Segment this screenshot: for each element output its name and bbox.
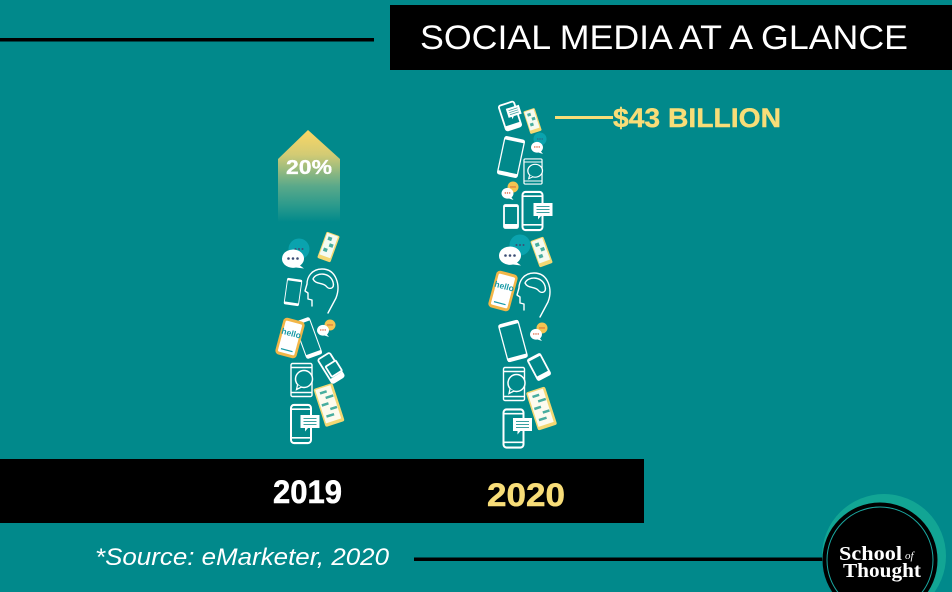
icon: phone with speech bubble (504, 368, 525, 400)
icon: yellow list phone (313, 383, 345, 427)
year label 2020: 2020 (487, 477, 565, 513)
icon: thin phone (284, 278, 302, 306)
title: SOCIAL MEDIA AT A GLANCE (420, 19, 908, 57)
icon: phone with message (291, 405, 320, 443)
icon: small yellow phone (523, 108, 542, 134)
title (390, 5, 952, 70)
year label 2019: 2019 (273, 474, 342, 510)
year bar (0, 459, 644, 523)
logo: School of Thought: Thought (843, 560, 921, 582)
logo: School of Thought: of (905, 550, 916, 562)
icon: head with brain (517, 273, 550, 317)
icon: small phone (504, 205, 518, 228)
icon: phone with message (522, 192, 552, 230)
icon: phone with message (504, 409, 532, 448)
icon: phone with message tilted (498, 100, 525, 131)
callout: $43 billion: $43 BILLION (613, 103, 781, 133)
icon: chat bubbles (282, 238, 310, 268)
logo: School of Thought: School (839, 543, 902, 565)
icon: small yellow phone (317, 231, 340, 263)
icon: small yellow phone (530, 236, 553, 268)
icon: yellow hello phone (487, 270, 519, 312)
icon: tablet (294, 317, 322, 359)
icon: yellow list phone (526, 386, 557, 431)
icon: phone with speech bubble (291, 364, 312, 396)
icon: small chat bubbles (501, 182, 518, 200)
icon: small chat bubbles (317, 320, 336, 337)
icon: chat bubbles (499, 234, 530, 266)
icon: tablet (498, 320, 528, 362)
logo: School of Thought (822, 494, 946, 592)
icon: phone with speech bubble (524, 159, 542, 184)
icon: chat bubbles (531, 132, 547, 154)
growth arrow: 20% (278, 130, 340, 222)
source note: *Source: eMarketer, 2020 (95, 544, 390, 571)
icon stack: 2020 (487, 100, 557, 448)
growth arrow: 20%: 20% (286, 157, 332, 179)
icon: small chat bubbles (530, 322, 548, 341)
icon: head with brain (305, 269, 338, 313)
icon: small phone (527, 354, 551, 380)
icon: yellow hello phone (274, 317, 306, 359)
icon: tablet (497, 136, 525, 178)
bottom rule line (414, 558, 830, 561)
icon: phone pair (318, 352, 345, 384)
icon stack: 2019 (274, 231, 345, 443)
top rule line (0, 38, 374, 42)
